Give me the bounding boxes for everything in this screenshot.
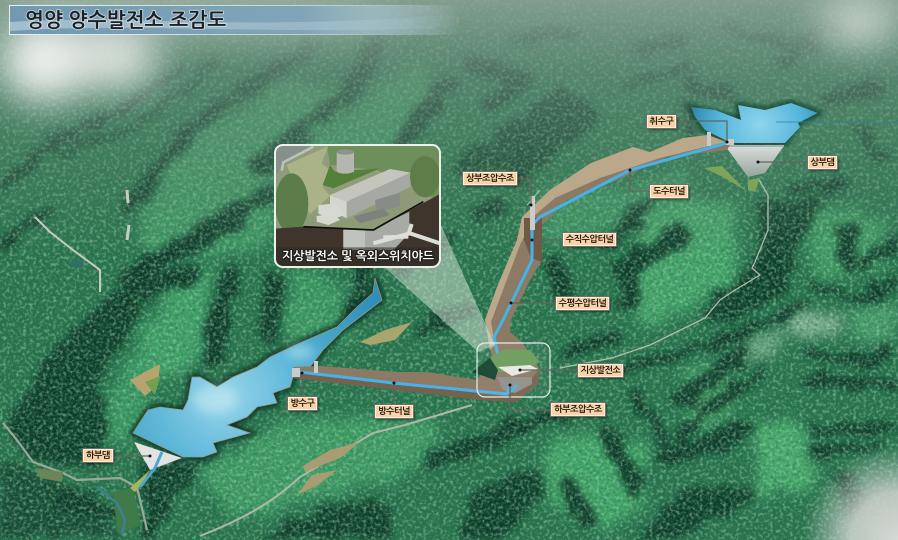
- label: outlet: 방수구: [291, 398, 314, 408]
- label: vertical pressure tunnel: [563, 233, 616, 246]
- label: horizontal pressure tunnel: 수평수압터널: [559, 298, 606, 308]
- label: upper dam: [808, 156, 837, 169]
- label: headrace tunnel: [650, 185, 688, 198]
- label: tailrace tunnel: 방수터널: [378, 406, 410, 416]
- waterway cross section: [292, 132, 734, 402]
- label: intake: [647, 115, 676, 128]
- inset caption: 지상발전소 및 옥외스위치야드: [282, 249, 435, 263]
- selection frame: [477, 343, 550, 397]
- large shadow masses: [0, 87, 825, 538]
- title banner: [9, 5, 461, 35]
- label: lower surge tank: [551, 403, 605, 416]
- label: upper dam: 상부댐: [811, 157, 834, 167]
- label: lower dam: 하부댐: [86, 450, 110, 460]
- label: tailrace tunnel: [375, 405, 413, 418]
- lower reservoir: [133, 278, 382, 457]
- upper reservoir: [691, 103, 818, 143]
- label: lower dam: [83, 449, 113, 462]
- lower dam: [134, 442, 182, 487]
- water conduit: [300, 143, 727, 394]
- surge tanks and structures: [292, 132, 734, 377]
- label: upper surge tank: [463, 172, 517, 185]
- label: surface power station: [578, 364, 623, 377]
- upper dam: [726, 146, 784, 177]
- upper reservoir shore shadow: [691, 103, 818, 143]
- label: intake: 취수구: [650, 116, 673, 126]
- fog patches: [0, 2, 898, 102]
- power station site: [490, 349, 540, 372]
- label: vertical pressure tunnel: 수직수압터널: [566, 234, 613, 244]
- lower reservoir shore shadow: [133, 278, 382, 457]
- corner fog: [800, 445, 898, 540]
- water highlights: [193, 346, 314, 414]
- label: horizontal pressure tunnel: [556, 297, 609, 310]
- upper haze: [0, 0, 898, 260]
- inset illustration: ground power station and switchyard: [274, 144, 441, 268]
- title: 영양 양수발전소 조감도: [25, 9, 226, 32]
- roads and farmland: [3, 166, 768, 536]
- label: lower surge tank: 하부조압수조: [554, 404, 602, 414]
- label: upper surge tank: 상부조압수조: [466, 173, 514, 183]
- leader lines: [113, 121, 837, 458]
- label: surface power station: 지상발전소: [581, 365, 620, 375]
- bright slopes: [105, 60, 898, 530]
- label: headrace tunnel: 도수터널: [653, 186, 685, 196]
- label: outlet: [288, 397, 317, 410]
- inset beam: [385, 225, 495, 352]
